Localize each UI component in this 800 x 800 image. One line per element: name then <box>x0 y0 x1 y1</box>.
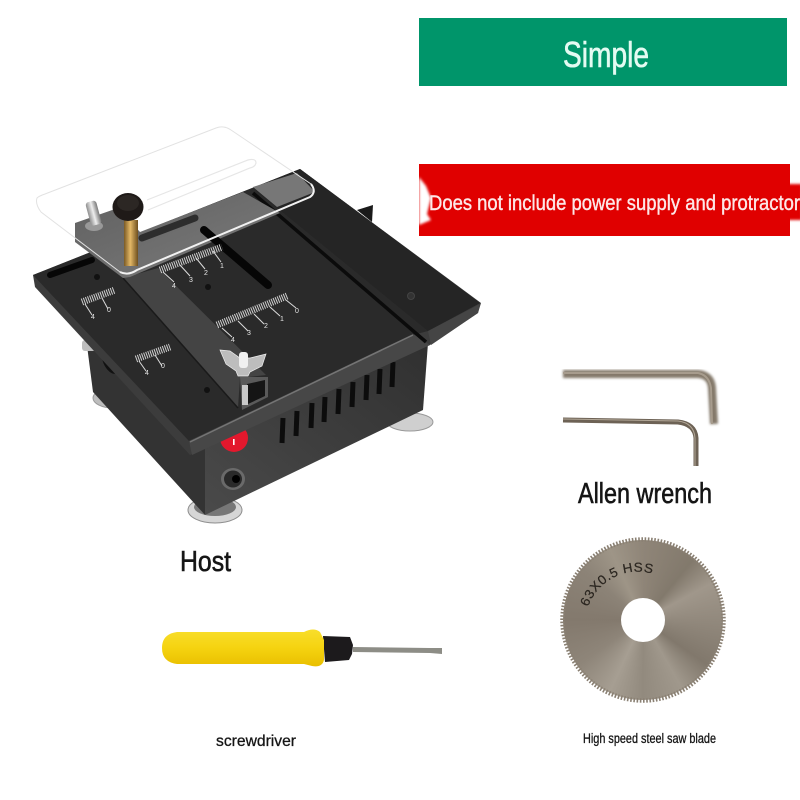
scale rulers: 2 <box>204 270 208 277</box>
left table slot <box>50 260 92 275</box>
fence head plate <box>75 173 315 278</box>
scale rulers: 0 <box>107 307 111 314</box>
banner: Simple <box>419 18 787 86</box>
blade slot <box>204 230 268 285</box>
scale rulers: 4 <box>172 283 176 290</box>
fence bar <box>123 268 268 410</box>
banner: Simple: Simple <box>563 34 649 75</box>
feet <box>93 388 433 523</box>
label: screwdriver: screwdriver <box>216 733 297 750</box>
scale rulers: 3 <box>189 277 193 284</box>
scale rulers: 1 <box>220 263 224 270</box>
product: table saw host <box>33 127 481 523</box>
scale rulers <box>82 247 299 377</box>
banner: exclusions notice <box>419 164 800 236</box>
acrylic guard <box>36 127 314 274</box>
housing <box>82 330 428 515</box>
thumb screw <box>85 200 103 231</box>
ventilation slots <box>282 362 393 443</box>
icon: allen wrenches <box>563 373 714 466</box>
label: Host: Host <box>180 546 231 578</box>
scale rulers: 0 <box>161 363 165 370</box>
scale rulers: 4 <box>91 314 95 321</box>
power jack <box>221 468 245 490</box>
scale rulers: 1 <box>280 316 284 323</box>
icon: saw blade: 63X0.5 HSS <box>580 562 653 606</box>
scale rulers: 2 <box>264 323 268 330</box>
scale rulers: 4 <box>231 337 235 344</box>
label: Allen wrench: Allen wrench <box>578 478 712 510</box>
icon: saw blade <box>560 537 726 703</box>
scale rulers: 4 <box>145 370 149 377</box>
table top <box>33 169 481 455</box>
power switch <box>220 424 248 452</box>
brass post and knob <box>112 193 144 266</box>
label: saw blade: High speed steel saw blade <box>583 731 716 746</box>
scale rulers: 0 <box>295 308 299 315</box>
wing nut <box>220 350 266 376</box>
scale rulers: 3 <box>247 330 251 337</box>
icon: screwdriver <box>162 630 442 666</box>
